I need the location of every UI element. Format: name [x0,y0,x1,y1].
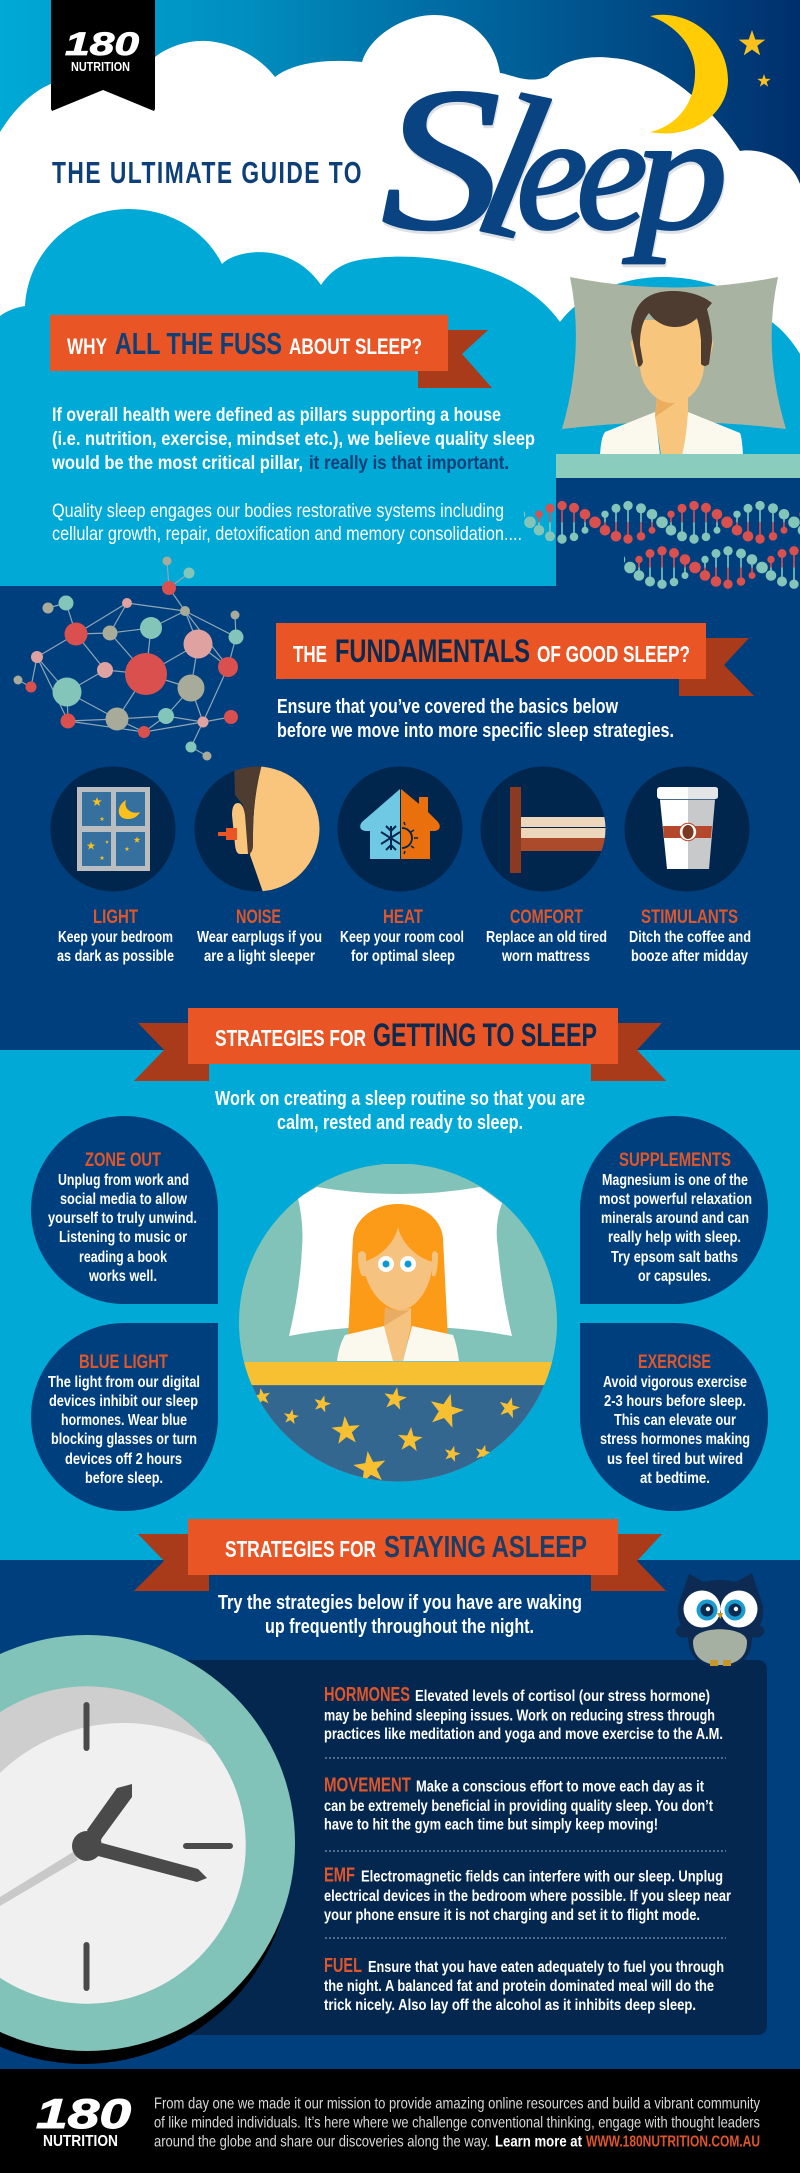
intro paragraph two: cellular growth, repair, detoxification and memory consolidation.... [52,523,522,545]
intro paragraph two [52,500,522,545]
molecule network [14,556,244,760]
white cloud [0,15,800,400]
panel: supplements: SUPPLEMENTS [619,1150,731,1171]
icon: window at night [50,766,176,892]
label: noise: are a light sleeper [204,948,315,965]
panel: staying asleep tips background [120,1660,767,2035]
woman in bed illustration [239,1164,557,1485]
tip: movement: can be extremely beneficial in providing quality sleep. You don’t [324,1798,713,1815]
tip: movement: MOVEMENT [324,1774,411,1796]
tip: emf: EMF [324,1864,355,1886]
panel: zone out: Listening to music or [59,1229,187,1246]
tip: emf: Electromagnetic fields can interfere with our sleep. Unplug [361,1868,723,1886]
panel: zone out: yourself to truly unwind. [48,1210,197,1227]
intro paragraph: would be the most critical pillar, [51,452,303,474]
intro paragraph [51,404,535,474]
icon: ear with earplug [194,766,320,892]
blanket [239,1362,557,1485]
stars [739,30,771,87]
intro paragraph two: Quality sleep engages our bodies restorative systems including [52,500,504,522]
getting to sleep intro [215,1088,585,1134]
panel: exercise [580,1323,768,1511]
icon: coffee cup [624,766,750,892]
footer logo [36,2090,131,2150]
fundamentals intro: Ensure that you’ve covered the basics below [277,696,618,718]
heading ribbon: staying asleep [134,1519,666,1591]
heading ribbon: fundamentals: OF GOOD SLEEP? [537,641,690,667]
panel: blue light: devices off 2 hours [65,1451,182,1468]
heading ribbon: getting to sleep: GETTING TO SLEEP [373,1017,597,1053]
tip: fuel: Ensure that you have eaten adequately to fuel you through [368,1959,724,1976]
logo word nutrition: NUTRITION [71,60,130,74]
logo mark 180: 180 [65,26,139,62]
panel: supplements: Magnesium is one of the [602,1172,748,1189]
tip: hormones: HORMONES [324,1684,410,1706]
label: comfort: worn mattress [501,948,590,965]
label: stimulants: Ditch the coffee and [629,929,751,946]
label: stimulants [629,907,751,965]
panel: blue light: devices inhibit our sleep [49,1393,198,1410]
panel: exercise: stress hormones making [600,1431,750,1448]
panel: blue light: blocking glasses or turn [51,1431,197,1448]
panel: zone out [31,1116,218,1304]
label: light [57,907,174,965]
tip: fuel: trick nicely. Also lay off the alcohol as it inhibits deep sleep. [324,1997,696,2014]
bed sheet band [556,454,800,478]
footer text [154,2096,760,2150]
staying asleep intro [218,1592,582,1638]
footer text: around the globe and share our discoveries along the way. [154,2134,490,2150]
logo ribbon [51,0,155,111]
label: comfort: COMFORT [510,907,583,928]
footer logo: NUTRITION [43,2133,118,2150]
heading ribbon: staying asleep: STAYING ASLEEP [384,1529,587,1564]
label: noise: Wear earplugs if you [197,929,322,946]
heading ribbon: staying asleep: STRATEGIES FOR [225,1536,376,1562]
label: light: as dark as possible [57,948,174,965]
heading ribbon: getting to sleep: STRATEGIES FOR [215,1025,366,1051]
staying asleep intro: Try the strategies below if you have are waking [218,1592,582,1614]
title small: THE ULTIMATE GUIDE TO [52,155,363,190]
label: comfort: Replace an old tired [486,929,607,946]
fundamentals intro [277,696,674,742]
night sky background [0,0,800,400]
tip: movement: Make a conscious effort to move each day as it [416,1778,704,1796]
panel: exercise: 2-3 hours before sleep. [604,1393,746,1410]
tip: movement [324,1774,713,1834]
intro paragraph: (i.e. nutrition, exercise, mindset etc.), we believe quality sleep [52,428,535,450]
heading ribbon: fundamentals [276,623,754,696]
panel: zone out: reading a book [79,1249,167,1266]
title Sleep script: S [381,46,501,273]
clock illustration [0,1635,303,2081]
panel: supplements: Try epsom salt baths [611,1249,738,1266]
label: noise: NOISE [236,907,281,928]
panel: exercise: EXERCISE [638,1352,711,1373]
getting to sleep intro: calm, rested and ready to sleep. [277,1112,523,1134]
title Sleep script: l [461,50,564,284]
panel: exercise: us feel tired but wired [607,1451,743,1468]
title Sleep script: p [623,81,728,264]
owl [676,1573,764,1667]
tip: hormones: may be behind sleeping issues. Work on reducing stress through [324,1708,715,1724]
label: stimulants: STIMULANTS [641,907,738,928]
panel: supplements: minerals around and can [601,1210,749,1227]
title Sleep script: e [516,81,588,264]
panel: zone out: works well. [88,1268,157,1285]
heading ribbon: fundamentals: FUNDAMENTALS [335,633,530,669]
dna strand upper [524,500,800,544]
label: light: Keep your bedroom [58,929,173,946]
label: heat: Keep your room cool [340,929,464,946]
tip: fuel [324,1955,724,2014]
label: noise [197,907,322,965]
panel: exercise: at bedtime. [640,1470,710,1487]
panel: zone out: social media to allow [60,1191,188,1208]
label: light: LIGHT [93,907,138,928]
tip: emf: your phone ensure it is not charging and set it to flight mode. [324,1907,700,1924]
panel: blue light: BLUE LIGHT [79,1352,168,1373]
title Sleep script: e [576,81,648,264]
moon [650,15,728,133]
title Sleep script [381,46,728,284]
panel: supplements: most powerful relaxation [599,1191,752,1208]
getting to sleep intro: Work on creating a sleep routine so that you are [215,1088,585,1110]
tip: hormones: practices like meditation and yoga and move exercise to the A.M. [324,1726,723,1743]
panel: supplements: really help with sleep. [608,1229,741,1246]
heading ribbon: why all the fuss [50,315,492,388]
panel: blue light: hormones. Wear blue [61,1412,187,1429]
intro paragraph: If overall health were defined as pillars supporting a house [52,404,501,426]
icon: bed [480,766,610,892]
blue cloud and section background [0,209,800,586]
tip: fuel: the night. A balanced fat and protein dominated meal will do the [324,1978,714,1995]
panel: zone out: Unplug from work and [58,1172,189,1189]
panel: blue light: The light from our digital [48,1374,200,1391]
heading ribbon: fundamentals: THE [293,641,327,667]
label: heat: for optimal sleep [351,948,455,965]
dna strand lower [624,546,799,589]
heading ribbon: getting to sleep [134,1008,666,1081]
tip: fuel: FUEL [324,1955,362,1977]
panel: exercise: Avoid vigorous exercise [603,1374,747,1391]
label: heat [340,907,464,965]
heading ribbon: why all the fuss: ALL THE FUSS [115,326,282,361]
label: comfort [486,907,607,965]
panel: supplements [580,1116,768,1304]
navy panel right of intro [556,478,800,586]
panel: exercise: This can elevate our [614,1412,736,1429]
navy fundamentals background [0,586,800,1050]
label: heat: HEAT [383,907,423,928]
footer band [0,2069,800,2173]
tip: hormones [324,1684,723,1743]
fundamentals intro: before we move into more specific sleep strategies. [277,720,674,742]
intro paragraph: it really is that important. [309,452,509,474]
heading ribbon: why all the fuss: WHY [67,334,107,359]
tip: emf [324,1864,731,1924]
man in bed illustration [562,277,786,455]
footer logo: 180 [36,2090,131,2137]
tip: movement: have to hit the gym each time but simply keep moving! [324,1816,658,1834]
panel: supplements: or capsules. [638,1268,711,1285]
footer text: Learn more at [495,2134,583,2150]
blue getting to sleep background [0,1050,800,1560]
tip: hormones: Elevated levels of cortisol (our stress hormone) [415,1688,710,1705]
panel: blue light: before sleep. [85,1470,163,1487]
label: stimulants: booze after midday [631,948,748,965]
icon: house hot and cold [338,766,462,892]
panel: zone out: ZONE OUT [85,1150,161,1171]
staying asleep intro: up frequently throughout the night. [265,1616,534,1638]
navy staying asleep background [0,1560,800,2070]
heading ribbon: why all the fuss: ABOUT SLEEP? [289,334,422,359]
panel: blue light [31,1323,218,1511]
